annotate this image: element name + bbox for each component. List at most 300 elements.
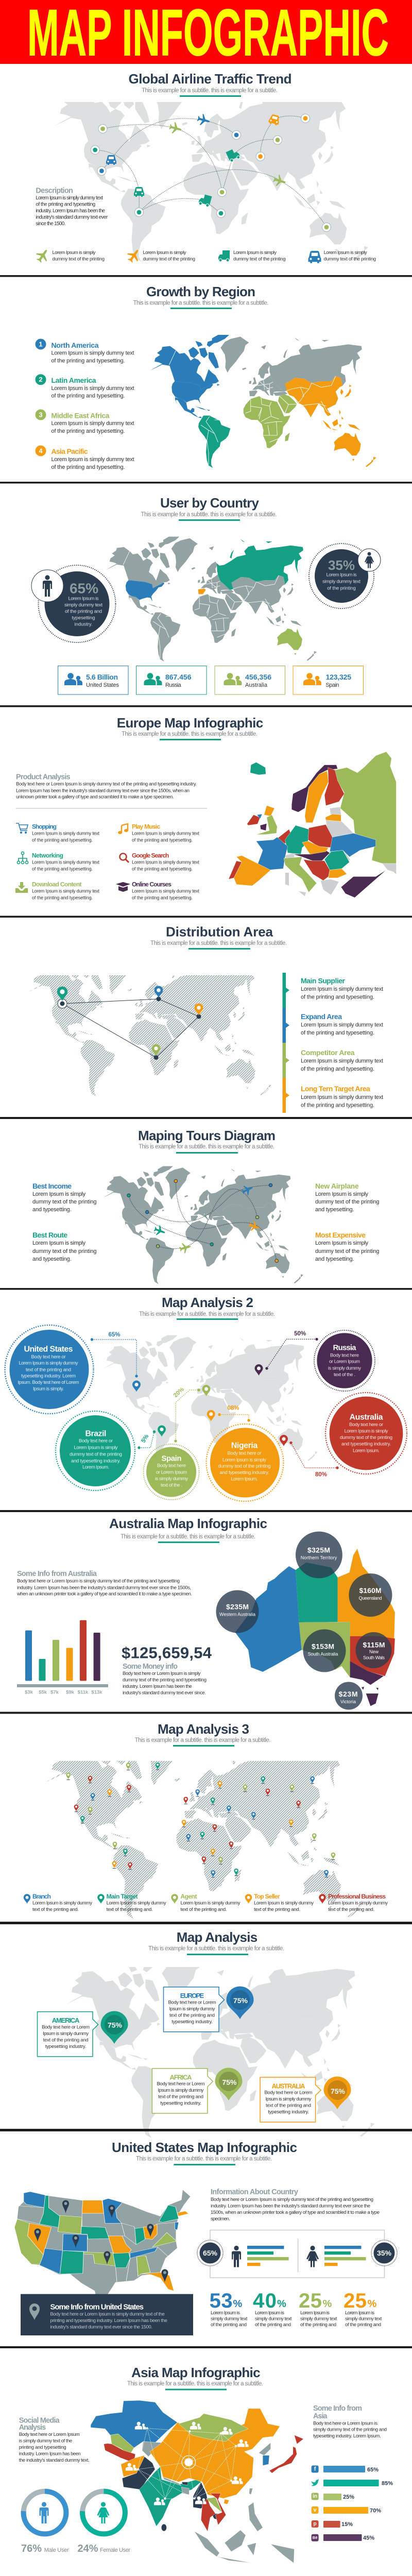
striped world map xyxy=(46,1761,363,1919)
title: United States Map Infographic xyxy=(112,2140,297,2155)
state labels: $115M xyxy=(363,1641,385,1649)
stat: 25% orange: of the printing and xyxy=(345,2322,381,2328)
underline xyxy=(180,95,241,97)
information about country: industry. Lorem Ipsum has been the industry's standard dummy text ever since the xyxy=(211,2203,370,2209)
stat: 25% orange: 25 xyxy=(344,2290,367,2312)
info text: when an unknown printer took a gallery of type and scrambled it to make a type specimen. xyxy=(16,1591,192,1597)
callout: America: typesetting industry. xyxy=(45,2044,86,2049)
title: Map Analysis 2 xyxy=(162,1295,253,1310)
social bars: Bē xyxy=(313,2535,317,2540)
money figure: Body text here or Lorem Ipsum is simply xyxy=(123,1671,201,1676)
social bars: 25% xyxy=(343,2494,354,2500)
description: industry's standard dummy text ever xyxy=(36,214,108,221)
label: best income: and typesetting. xyxy=(32,1207,71,1213)
panel: united states map infographic xyxy=(14,2140,397,2335)
stat box: Russia: Russia xyxy=(165,682,181,688)
label: most expensive: Lorem Ipsum is simply xyxy=(315,1240,369,1246)
state labels: $160M xyxy=(359,1586,381,1595)
subtitle: This is example for a subtitle. this is example for a subtitle. xyxy=(148,1946,284,1952)
label: best route xyxy=(32,1231,97,1262)
region list: 2 xyxy=(39,376,43,383)
some info dark box: Some Info from United States xyxy=(50,2303,144,2311)
state labels: South Australia xyxy=(308,1652,338,1657)
legend: agent xyxy=(171,1893,241,1912)
title: Australia Map Infographic xyxy=(109,1516,267,1531)
legend: top seller: text of the printing and. xyxy=(254,1907,300,1912)
callout: Australia xyxy=(260,2076,351,2122)
legend: main target xyxy=(97,1893,166,1912)
stat: 53% xyxy=(210,2290,248,2328)
world map xyxy=(66,1956,375,2138)
product analysis text: Product Analysis xyxy=(16,773,71,782)
label: new airplane: New Airplane xyxy=(315,1182,359,1190)
world map xyxy=(55,102,368,262)
area: expand area: Lorem Ipsum is simply dummy text xyxy=(301,1022,383,1028)
label: most expensive: Most Expensive xyxy=(315,1231,366,1239)
state labels xyxy=(219,1546,385,1704)
social media analysis text: Body text here or Lorem Ipsum xyxy=(19,2432,80,2437)
subtitle: This is example for a subtitle. this is example for a subtitle. xyxy=(141,512,277,518)
legend: main target: Lorem Ipsum is simply dummy xyxy=(107,1900,166,1906)
circle: Russia xyxy=(314,1330,375,1391)
social media analysis text xyxy=(19,2416,90,2463)
area: competitor area: Competitor Area xyxy=(301,1048,355,1057)
feature: download content xyxy=(15,881,99,901)
callout: Europe xyxy=(164,1987,253,2032)
some info from asia: Some Info from xyxy=(313,2404,362,2413)
bar chart: $13k xyxy=(91,1690,102,1695)
some info from asia: Body text here or Lorem Ipsum is xyxy=(313,2420,377,2427)
circle: Australia xyxy=(325,1393,407,1474)
social media analysis text: is simply dummy text of the xyxy=(19,2438,72,2444)
description: Description xyxy=(36,187,73,195)
area: long term target area: Long Tern Target Area xyxy=(301,1084,370,1093)
state labels: $23M xyxy=(339,1690,357,1698)
label: new airplane: Lorem Ipsum is simply xyxy=(315,1191,369,1197)
information about country: specimen. xyxy=(211,2216,230,2222)
legend: dummy text of the printing xyxy=(53,257,105,262)
circle: Nigeria: Nigeria xyxy=(231,1442,258,1450)
title: Map Analysis xyxy=(177,1929,258,1945)
some info from asia xyxy=(313,2404,387,2439)
area: main supplier: Lorem Ipsum is simply dummy text xyxy=(301,986,383,992)
state labels: Western Australia xyxy=(219,1612,255,1617)
circle: United States: Body text here or xyxy=(31,1354,66,1360)
circle: Russia: is simply dummy xyxy=(328,1365,361,1371)
planes xyxy=(153,1183,261,1254)
legend: agent: text of the printing and. xyxy=(180,1907,227,1912)
stat: 25% green: Lorem Ipsum is xyxy=(300,2310,330,2316)
state labels: South Wals xyxy=(363,1655,385,1660)
region list: Asia Pacific xyxy=(52,447,88,455)
circle: Nigeria: Body text here or xyxy=(228,1451,262,1456)
65% male circle: Lorem Ipsum is xyxy=(68,596,99,602)
legend: dummy text of the printing xyxy=(324,257,376,262)
callout: Europe: EUROPE xyxy=(180,1992,204,1999)
state labels: $235M xyxy=(226,1602,249,1611)
legend: top seller: Lorem Ipsum is simply dummy xyxy=(254,1900,314,1906)
underline xyxy=(165,2388,227,2391)
gender comparison box xyxy=(197,2230,397,2278)
legend: agent: Lorem Ipsum is simply dummy xyxy=(180,1900,241,1906)
feature: google search: Lorem Ipsum is simply dummy text xyxy=(132,860,199,865)
social bars: 70% xyxy=(370,2508,381,2514)
circle: Nigeria xyxy=(206,1424,283,1501)
description: since the 1500. xyxy=(36,221,65,227)
europe map xyxy=(229,752,396,897)
network lines xyxy=(62,999,199,1057)
subtitle: This is example for a subtitle. this is example for a subtitle. xyxy=(139,1311,275,1317)
region list: Middle East Africa xyxy=(52,411,110,419)
35% female circle: Lorem Ipsum is xyxy=(327,572,357,578)
underline xyxy=(176,1152,238,1154)
donut: male users: Male User xyxy=(44,2547,69,2553)
state bubbles xyxy=(216,1532,392,1709)
65% male circle xyxy=(31,565,115,642)
area: main supplier: Main Supplier xyxy=(301,977,346,985)
legend: branch xyxy=(24,1893,92,1912)
asia map xyxy=(91,2400,303,2563)
65% male circle: industry. xyxy=(74,621,93,628)
circle: Russia: Body text here xyxy=(330,1353,359,1358)
feature: shopping xyxy=(16,823,99,843)
legend: branch: Lorem Ipsum is simply dummy xyxy=(32,1900,92,1906)
donut: female users: Female User xyxy=(100,2547,130,2553)
social media analysis text: Analysis xyxy=(19,2424,46,2432)
social bars: v xyxy=(314,2507,317,2513)
circle: Brazil: and typesetting industry. xyxy=(71,1458,121,1464)
bar chart: $7k xyxy=(50,1690,59,1695)
callout: Europe: Body text here or Lorem xyxy=(168,2000,216,2005)
region list: Lorem Ipsum is simply dummy text xyxy=(52,350,134,357)
panel: asia map infographic xyxy=(19,2365,393,2563)
feature: google search xyxy=(119,852,199,872)
state labels: $153M xyxy=(312,1642,334,1651)
gender comparison box: 35% xyxy=(377,2249,392,2257)
percent labels: 50% xyxy=(294,1331,306,1337)
panel: growth by region xyxy=(35,284,376,470)
underline xyxy=(160,739,221,740)
stat box: United States: United States xyxy=(86,682,119,688)
circle: Spain: Body text here xyxy=(157,1463,186,1468)
callout: Africa: Body text here or Lorem xyxy=(157,2081,205,2087)
feature: google search: Google Search xyxy=(132,852,169,859)
region list: 1 xyxy=(39,340,43,348)
world map with highlighted countries xyxy=(106,537,317,662)
description: industry. Lorem Ipsum has been the xyxy=(36,208,106,214)
label: new airplane xyxy=(315,1182,379,1213)
info text xyxy=(16,1570,192,1597)
subtitle: This is example for a subtitle. this is example for a subtitle. xyxy=(150,940,287,946)
donut: male users: 76% xyxy=(21,2543,42,2554)
label: most expensive: dummy text of the printing xyxy=(315,1248,379,1255)
circle: United States: typesetting industry. Lorem xyxy=(21,1374,76,1379)
money figure: dummy text of the printing and typesetting xyxy=(123,1677,207,1683)
circle: Brazil xyxy=(56,1411,135,1490)
callout: America: AMERICA xyxy=(52,2016,80,2024)
info text: Some Info from Australia xyxy=(17,1570,97,1578)
social media analysis text: printing and typesetting xyxy=(19,2445,66,2450)
network lines and nodes xyxy=(137,2427,237,2500)
panel: map analysis xyxy=(37,1929,375,2138)
circle: Australia: Australia xyxy=(349,1413,383,1422)
feature: networking: Lorem Ipsum is simply dummy text xyxy=(32,860,99,865)
social bars: 45% xyxy=(363,2535,374,2541)
stat: 25% green: % xyxy=(322,2298,332,2310)
callout: Africa xyxy=(152,2068,242,2113)
state labels: New xyxy=(369,1649,379,1654)
bar chart: $9k xyxy=(66,1690,75,1695)
stat: 25% orange: Lorem Ipsum is xyxy=(345,2310,374,2316)
callout: Europe: text of the printing and xyxy=(169,2012,215,2019)
label: best route: and typesetting. xyxy=(32,1256,71,1262)
callout: Australia: Ipsum is simply dummy xyxy=(266,2096,312,2102)
circle: Brazil: Brazil xyxy=(85,1429,106,1438)
area: expand area: of the printing and typesetting. xyxy=(301,1030,374,1036)
world map xyxy=(102,1335,318,1462)
subtitle: This is example for a subtitle. this is example for a subtitle. xyxy=(121,1534,255,1540)
social bars: 85% xyxy=(382,2480,393,2486)
stat: 53%: 53 xyxy=(210,2290,233,2312)
underline xyxy=(187,1954,248,1955)
striped world map xyxy=(29,975,271,1096)
state labels: $325M xyxy=(307,1546,330,1554)
underline xyxy=(177,1318,238,1320)
route dots xyxy=(127,1179,278,1262)
gender comparison box: 65% xyxy=(203,2249,218,2257)
region list: of the printing and typesetting. xyxy=(52,428,125,434)
label: best route: Best Route xyxy=(32,1231,67,1239)
stat: 40%: of the printing and xyxy=(255,2322,291,2328)
legend: dummy text of the printing xyxy=(143,257,195,262)
callout: Africa: text of the printing and xyxy=(158,2094,203,2100)
legend: Lorem Ipsum is simply xyxy=(233,250,277,256)
united states map xyxy=(14,2190,191,2299)
legend: top seller xyxy=(245,1893,314,1912)
subtitle: This is example for a subtitle. this is example for a subtitle. xyxy=(133,300,269,307)
callout: Europe: typesetting industry. xyxy=(171,2019,213,2025)
state pins xyxy=(34,2200,168,2282)
label: best route: dummy text of the printing xyxy=(32,1248,97,1255)
callout: Australia: text of the printing and xyxy=(266,2103,311,2108)
circle: Brazil: Lorem Ipsum. xyxy=(82,1464,109,1470)
route lines xyxy=(95,116,327,227)
area: expand area xyxy=(301,1012,383,1036)
bar chart: $11k xyxy=(78,1690,89,1695)
feature: online courses: Lorem Ipsum is simply dummy text xyxy=(132,889,199,894)
circle: Nigeria: Lorem Ipsum is simply xyxy=(222,1457,266,1463)
legend: branch: Branch xyxy=(32,1893,51,1900)
region list: North America xyxy=(52,341,99,349)
circle: Russia: or Lorem Ipsum xyxy=(329,1359,360,1364)
area: long term target area xyxy=(301,1084,383,1109)
title: User by Country xyxy=(160,495,260,511)
65% male circle: of the printing and xyxy=(65,609,102,614)
callout: Australia: 75% xyxy=(331,2087,346,2095)
circle: Brazil: Lorem Ipsum is simply xyxy=(74,1445,118,1451)
social bars: 15% xyxy=(341,2521,353,2528)
panel: australia map infographic xyxy=(16,1516,395,1709)
stat: 53%: simply dummy text xyxy=(211,2316,248,2321)
vehicles on routes xyxy=(106,113,287,207)
feature: networking: Networking xyxy=(32,852,63,859)
social bars: p xyxy=(314,2521,317,2527)
location pins xyxy=(66,1762,335,1877)
callout: America: 75% xyxy=(108,2021,123,2029)
feature: play music: Lorem Ipsum is simply dummy text xyxy=(132,831,199,836)
feature: download content: Download Content xyxy=(32,881,81,888)
underline xyxy=(158,1541,219,1543)
stat: 25% orange xyxy=(344,2290,382,2328)
panel: map analysis 2 xyxy=(5,1295,407,1501)
description: Lorem Ipsum is simply dummy text xyxy=(36,195,103,201)
feature: play music: of the printing and typesetting. xyxy=(132,838,193,843)
stat box: Russia: 867.456 xyxy=(165,673,192,681)
money figure: industry. Lorem Ipsum has been the xyxy=(123,1684,192,1689)
stat: 40% xyxy=(253,2290,292,2328)
subtitle: This is example for a subtitle. this is example for a subtitle. xyxy=(136,2156,272,2162)
callout: Australia: AUSTRALIA xyxy=(272,2082,305,2090)
stat: 25% orange: % xyxy=(368,2298,377,2310)
state labels: Queensland xyxy=(358,1596,382,1601)
circle: Spain: text of the . xyxy=(161,1483,182,1488)
some info dark box: Body text here or Lorem Ipsum is simply dummy text of the xyxy=(50,2311,165,2317)
some info from asia: typesetting industry. Lorem Ipsum. xyxy=(313,2433,381,2439)
stat box: United States xyxy=(58,666,128,694)
percent labels: 08% xyxy=(227,1405,239,1412)
circle: Australia: and typesetting industry. xyxy=(341,1442,391,1447)
35% female circle xyxy=(309,544,381,608)
area: competitor area: of the printing and typesetting. xyxy=(301,1066,374,1072)
feature: online courses: Online Courses xyxy=(132,881,171,888)
product analysis text: unknown printer took a gallery of type and scrambled it to make a type specimen. xyxy=(16,794,174,800)
circle: Spain: is simply dummy xyxy=(155,1476,188,1482)
legend: Lorem Ipsum is simply xyxy=(324,250,367,256)
title: Growth by Region xyxy=(146,284,255,299)
circle: Russia: text of the . xyxy=(334,1372,355,1378)
area: competitor area: Lorem Ipsum is simply dummy text xyxy=(301,1058,383,1064)
information about country xyxy=(211,2188,380,2222)
money figure: $125,659,54 xyxy=(122,1643,212,1662)
feature: networking xyxy=(17,852,99,872)
social bars: in xyxy=(313,2494,317,2499)
subtitle: This is example for a subtitle. this is example for a subtitle. xyxy=(139,1144,274,1150)
label: best income: dummy text of the printing xyxy=(32,1199,97,1205)
legend xyxy=(34,246,376,265)
stat: 40%: Lorem Ipsum is xyxy=(255,2310,284,2316)
legend: branch: text of the printing and. xyxy=(32,1907,79,1912)
circle: United States: Ipsum is simply. xyxy=(33,1386,64,1392)
region list xyxy=(35,339,134,470)
vertical legend bar xyxy=(282,973,289,1113)
information about country: Information About Country xyxy=(211,2188,298,2196)
callout: America: Ipsum is simply dummy xyxy=(43,2031,89,2037)
stat: 25% green: of the printing and xyxy=(300,2322,336,2328)
some info from asia: Asia xyxy=(313,2412,328,2420)
circle: Australia: dummy text of the printing xyxy=(340,1435,392,1440)
stat box: Australia: Australia xyxy=(245,682,268,688)
stat: 40%: % xyxy=(277,2298,286,2310)
circle: Australia: Lorem Ipsum. xyxy=(353,1448,380,1454)
circle: United States: Ipsum. Body test here of Lorem xyxy=(18,1380,79,1385)
information about country: 1500s, when an unknown printer took a gallery of type and scrambled it to make a type xyxy=(211,2210,380,2215)
some info dark box: printing and typesetting industry. Lorem Ipsum has been the xyxy=(50,2318,167,2324)
panel: distribution area xyxy=(29,926,383,1113)
circle: United States: United States xyxy=(24,1345,73,1354)
connectors and percentages xyxy=(92,1339,337,1468)
callout: Europe: 75% xyxy=(233,1996,248,2005)
legend: professional business: Lorem Ipsum is simply dummy xyxy=(328,1900,388,1906)
legend: Lorem Ipsum is simply xyxy=(143,250,186,256)
area: main supplier: of the printing and typesetting. xyxy=(301,994,374,1001)
region list: 4 xyxy=(39,447,43,454)
stat box: Spain: 123,325 xyxy=(325,673,351,681)
panel: user by country xyxy=(31,495,381,694)
label: most expensive: and typesetting. xyxy=(315,1256,354,1262)
social media analysis text: the industry's standard dummy text. xyxy=(19,2458,90,2463)
stat: 25% orange: simply dummy text xyxy=(345,2316,382,2321)
bar chart: $3k xyxy=(25,1690,33,1695)
connector dots xyxy=(91,1338,339,1469)
location pins xyxy=(57,986,203,1060)
circle: United States: text of the printing and xyxy=(26,1367,71,1372)
subtitle: This is example for a subtitle. this is example for a subtitle. xyxy=(142,88,278,94)
title: Distribution Area xyxy=(166,924,273,940)
label: best income xyxy=(32,1182,97,1213)
description: of the printing and typesetting xyxy=(36,202,95,207)
callout: Africa: typesetting industry. xyxy=(160,2100,201,2106)
subtitle: This is example for a subtitle. this is example for a subtitle. xyxy=(122,731,258,737)
label: new airplane: and typesetting. xyxy=(315,1207,354,1213)
social bars: f xyxy=(314,2466,316,2472)
some info dark box xyxy=(21,2294,193,2335)
circle: Spain: or Lorem Ipsum xyxy=(156,1469,187,1476)
feature: download content: of the printing and typesetting. xyxy=(32,895,93,901)
stat: 40%: simply dummy text xyxy=(255,2316,292,2321)
callout: Europe: Ipsum is simply dummy xyxy=(169,2006,215,2012)
feature: download content: Lorem Ipsum is simply dummy text xyxy=(32,889,99,894)
underline xyxy=(188,948,250,950)
some info from asia: simply dummy text of the printing and xyxy=(313,2427,387,2433)
label: most expensive xyxy=(315,1231,379,1262)
panel: global airline traffic trend xyxy=(34,71,376,265)
circle: Spain xyxy=(144,1444,199,1500)
callout: America: Body text here or Lorem xyxy=(42,2025,90,2030)
label: best income: Lorem Ipsum is simply xyxy=(32,1191,85,1197)
title: Asia Map Infographic xyxy=(131,2365,261,2380)
underline xyxy=(174,2164,235,2165)
state labels: Northern Territory xyxy=(301,1555,337,1560)
callout: Africa: 75% xyxy=(222,2078,237,2087)
bar chart xyxy=(17,1620,108,1695)
stat: 25% green xyxy=(299,2290,337,2328)
australia states map xyxy=(235,1549,395,1706)
label: best route: Lorem Ipsum is simply xyxy=(32,1240,85,1246)
region list: 3 xyxy=(39,411,43,418)
callout: Australia: Body text here or Lorem xyxy=(265,2090,313,2096)
product analysis text: Lorem Ipsum has been the industry's standard dummy text ever since the 1500s, when an xyxy=(16,788,190,793)
underline xyxy=(173,1745,234,1747)
region list: Lorem Ipsum is simply dummy text xyxy=(52,420,134,427)
title: Map Analysis 3 xyxy=(158,1721,249,1737)
legend: top seller: Top Seller xyxy=(254,1893,280,1900)
stat box: Australia xyxy=(215,666,285,694)
bar chart: $5k xyxy=(39,1690,47,1695)
region list: of the printing and typesetting. xyxy=(52,358,125,364)
stat: 25% green: simply dummy text xyxy=(300,2316,337,2321)
product analysis text: Body text here or Lorem Ipsum is simply dummy text of the printing and typesetting industry. xyxy=(16,781,197,787)
legend: professional business: Professional Business xyxy=(328,1893,386,1900)
